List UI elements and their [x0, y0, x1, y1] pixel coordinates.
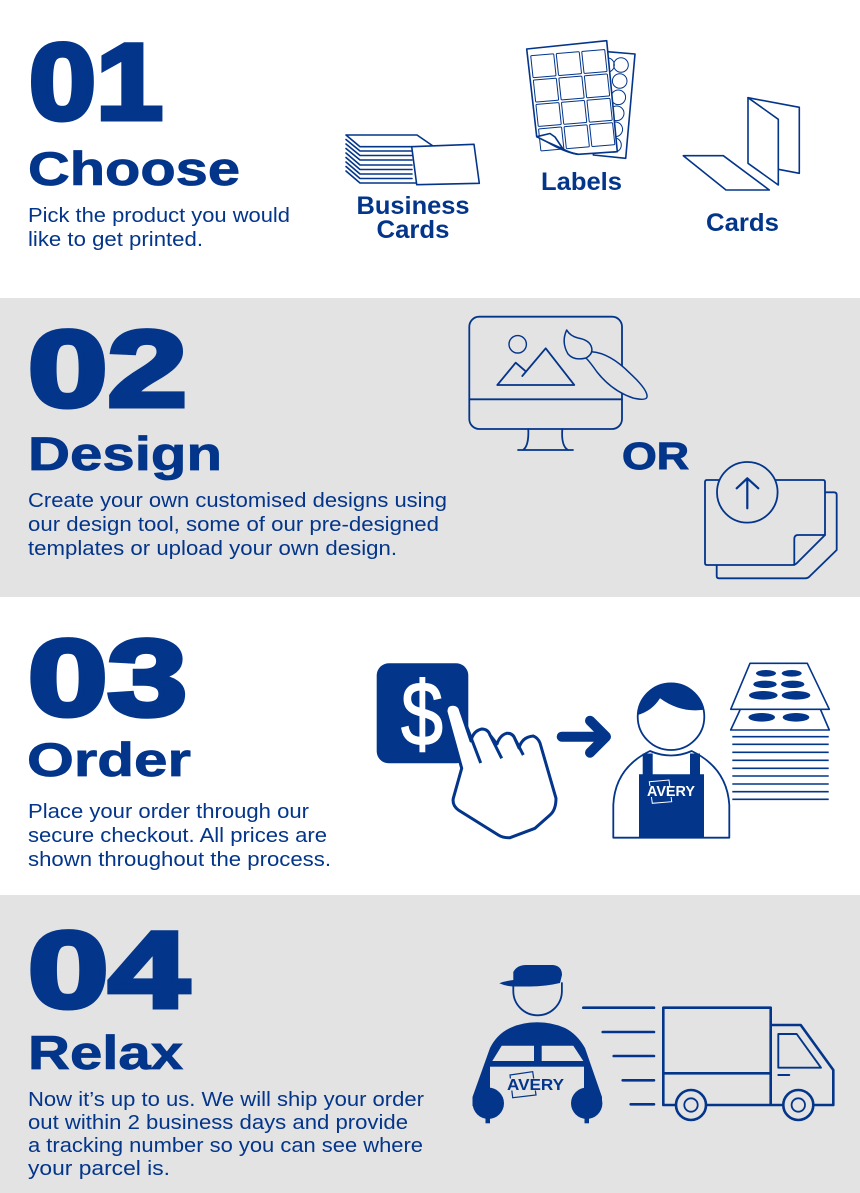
icon: Avery worker: AVERY — [647, 784, 695, 800]
icon: printed sheets stack — [731, 663, 829, 799]
icon: business cards — [346, 135, 479, 185]
label: Business Cards — [356, 192, 470, 244]
arrow: order to printer — [562, 721, 606, 753]
text: OR: OR — [622, 436, 689, 478]
icon: label sheets — [527, 41, 635, 158]
description: relax — [28, 1089, 424, 1180]
panel: step 1 choose — [28, 21, 799, 251]
icon: price button: $ — [401, 664, 443, 765]
step number 02: 02 — [28, 308, 187, 429]
icon: Avery worker — [613, 683, 729, 838]
description: order: shown throughout the process. — [28, 849, 331, 871]
icon: pointing hand — [446, 704, 556, 838]
description: design: templates or upload your own design. — [28, 538, 397, 560]
description: order: secure checkout. All prices are — [28, 825, 327, 847]
description: relax: your parcel is. — [28, 1158, 170, 1180]
heading: Relax: Relax — [28, 1026, 183, 1079]
label: Labels: Labels — [541, 168, 622, 196]
icon: price button — [377, 663, 468, 765]
description: design — [28, 490, 447, 560]
label: Business Cards: Business — [356, 192, 470, 220]
heading: Order: Order — [27, 733, 191, 786]
description: design: our design tool, some of our pre-designed — [28, 514, 439, 536]
icon: folded cards — [683, 98, 799, 190]
description: choose: Pick the product you would — [28, 205, 290, 227]
icon: delivery person with parcel: AVERY — [507, 1077, 564, 1094]
label: Business Cards: Cards — [376, 216, 450, 244]
panel: step 2 design — [0, 298, 860, 597]
step number 01: 01 — [29, 21, 163, 142]
icon: upload document — [705, 462, 837, 578]
heading: Choose: Choose — [28, 142, 240, 195]
panel: step 3 order — [27, 617, 829, 871]
panel: step 4 relax — [0, 895, 860, 1193]
step number 04: 04 — [28, 909, 189, 1030]
step number 03: 03 — [28, 617, 187, 738]
description: design: Create your own customised designs using — [28, 490, 447, 512]
icon: delivery truck — [663, 1008, 833, 1120]
icon: delivery person with parcel — [472, 965, 602, 1127]
speed lines — [583, 1008, 654, 1104]
label: Cards: Cards — [706, 209, 779, 237]
description: relax: Now it’s up to us. We will ship your order — [28, 1089, 424, 1111]
description: choose: like to get printed. — [28, 229, 203, 251]
description: order — [28, 801, 331, 871]
heading: Design: Design — [28, 427, 222, 480]
description: relax: out within 2 business days and provide — [28, 1112, 408, 1134]
description: choose — [28, 205, 290, 251]
icon: monitor with paintbrush — [469, 317, 647, 450]
description: relax: a tracking number so you can see where — [28, 1135, 423, 1157]
description: order: Place your order through our — [28, 801, 309, 823]
